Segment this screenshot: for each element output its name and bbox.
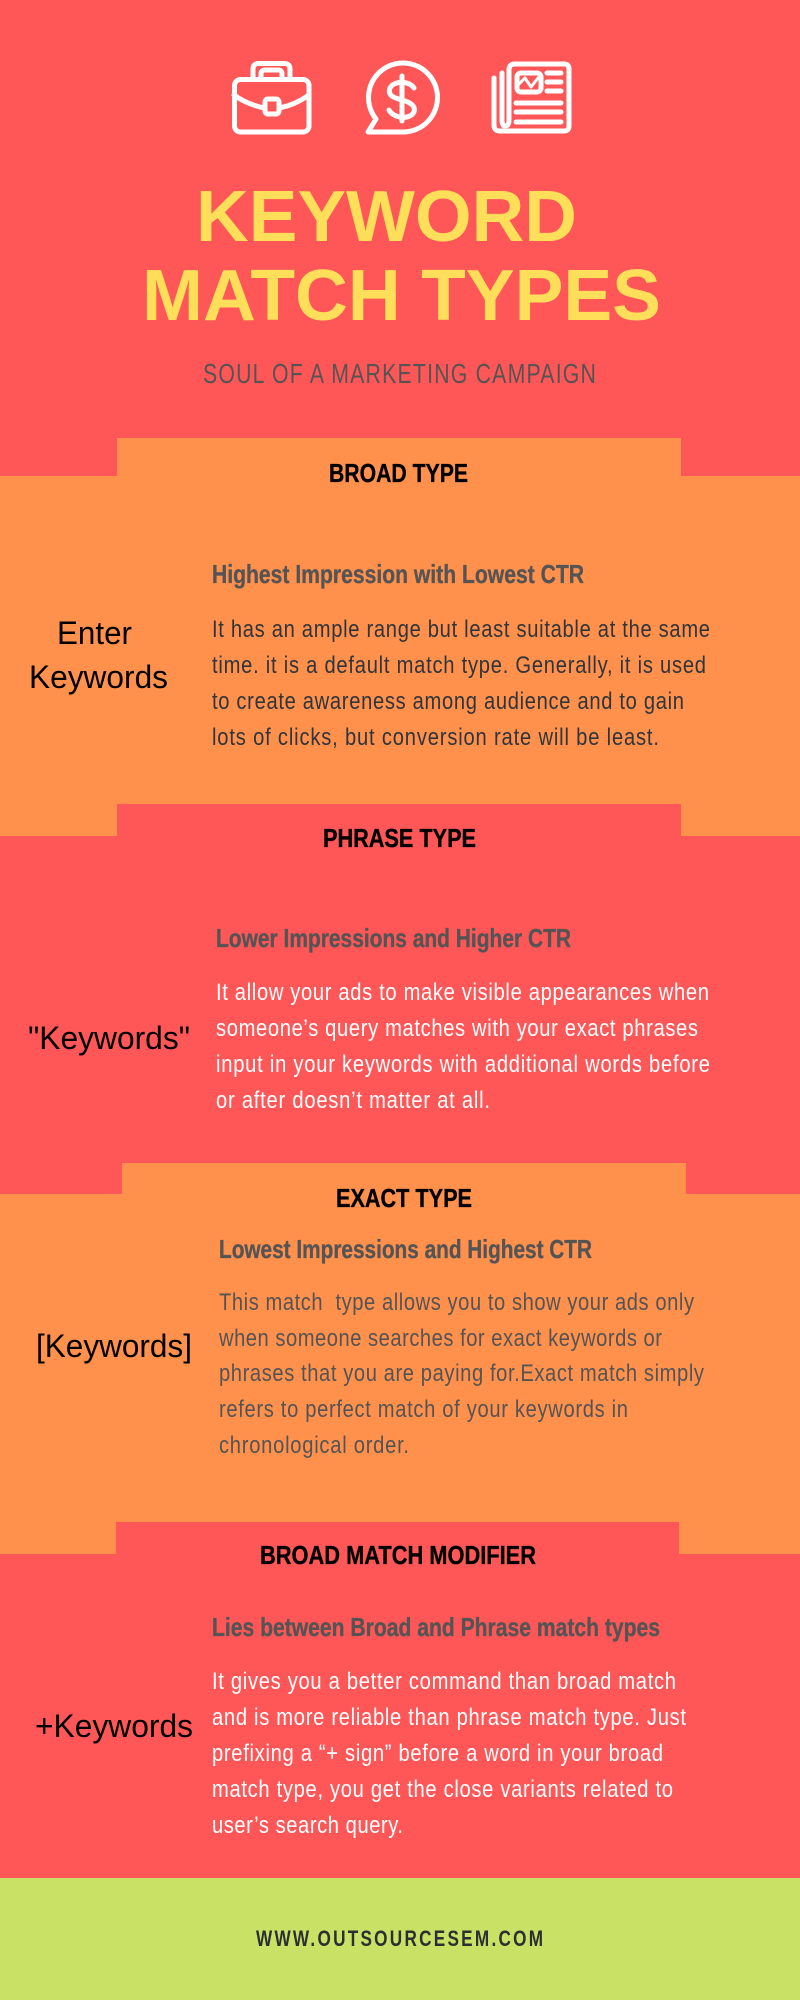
body text: It allow your ads to make visible appearances when (216, 978, 709, 1005)
body text: time. it is a default match type. Generally, it is used (212, 651, 706, 678)
subtitle: SOUL OF A MARKETING CAMPAIGN (203, 358, 596, 390)
panel: broad match modifier (0, 1522, 800, 1878)
body text (212, 1667, 686, 1838)
body text: It gives you a better command than broad match (212, 1667, 676, 1694)
icon: newspaper (494, 64, 569, 131)
keyword label: enter keywords: Enter (57, 615, 132, 651)
body text: to create awareness among audience and to gain (212, 687, 684, 714)
body text: phrases that you are paying for.Exact match simply (219, 1359, 705, 1386)
title (142, 177, 661, 336)
body text: prefixing a “+ sign” before a word in your broad (212, 1739, 663, 1766)
body text: lots of clicks, but conversion rate will be least. (212, 723, 659, 750)
icon: dollar speech bubble (368, 63, 437, 132)
panel: exact type (0, 1163, 800, 1554)
body text: and is more reliable than phrase match type. Just (212, 1703, 686, 1730)
subheading: Lowest Impressions and Highest CTR (219, 1234, 592, 1264)
body text: input in your keywords with additional words before (216, 1050, 710, 1077)
body text: when someone searches for exact keywords or (218, 1324, 663, 1351)
heading: broad match modifier: BROAD MATCH MODIFIER (260, 1540, 536, 1570)
body text: user’s search query. (212, 1811, 403, 1838)
body text: match type, you get the close variants related to (212, 1775, 673, 1802)
icon: briefcase (234, 64, 309, 132)
footer band (0, 1878, 800, 2000)
keyword label: plus keywords: +Keywords (35, 1708, 193, 1744)
body text (218, 1288, 705, 1458)
body text: It has an ample range but least suitable at the same (212, 615, 710, 642)
subheading: Lower Impressions and Higher CTR (216, 923, 571, 953)
title: KEYWORD (196, 177, 577, 257)
title: MATCH TYPES (142, 256, 661, 336)
body text: This match type allows you to show your ads only (219, 1288, 695, 1315)
keyword label: bracketed keywords: [Keywords] (36, 1328, 192, 1364)
heading: broad type: BROAD TYPE (329, 458, 468, 488)
subheading: Highest Impression with Lowest CTR (212, 559, 584, 589)
keyword label: enter keywords: Keywords (29, 659, 168, 695)
body text (216, 978, 710, 1113)
subheading: Lies between Broad and Phrase match types (212, 1612, 660, 1642)
body text: chronological order. (219, 1431, 409, 1458)
footer url: WWW.OUTSOURCESEM.COM (256, 1927, 543, 1952)
body text (212, 615, 710, 750)
header panel (0, 0, 800, 476)
panel: broad type (0, 438, 800, 836)
body text: refers to perfect match of your keywords in (219, 1395, 628, 1422)
keyword label: enter keywords (29, 615, 168, 695)
body text: or after doesn’t matter at all. (216, 1086, 490, 1113)
keyword label: quoted keywords: "Keywords" (28, 1020, 190, 1056)
heading: exact type: EXACT TYPE (336, 1183, 472, 1213)
heading: phrase type: PHRASE TYPE (323, 823, 476, 853)
body text: someone’s query matches with your exact phrases (216, 1014, 698, 1041)
panel: phrase type (0, 804, 800, 1194)
